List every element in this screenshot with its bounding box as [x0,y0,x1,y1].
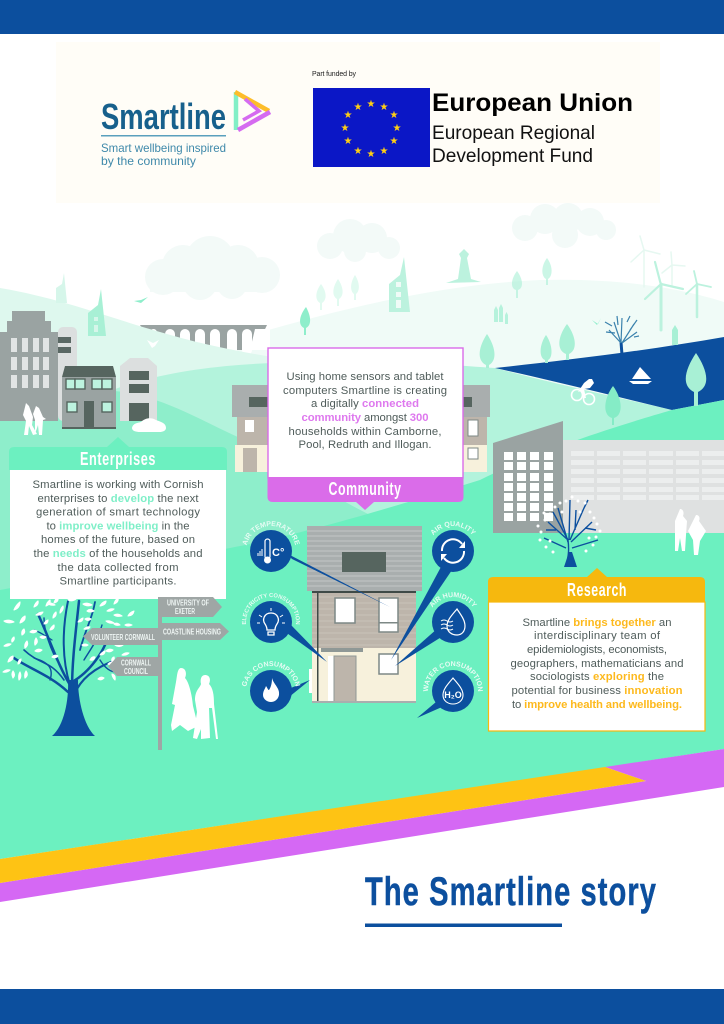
enterprises body: homes of the future, based on [41,534,195,546]
enterprises heading: Enterprises [80,449,156,469]
sign: Cornwall Council [108,657,159,676]
EU flag: ★ [367,149,376,160]
icon: air temperature: C° [272,547,284,559]
community body [268,348,463,478]
white bird [147,340,159,348]
enterprises body: Smartline is working with Cornish [32,479,204,491]
research body: epidemiologists, economists, [527,644,667,656]
icon: air quality: AIR QUALITY [431,521,476,536]
research heading: Research [567,580,627,600]
research buildings [493,421,724,533]
middle hill [100,362,724,560]
icon: gas consumption: GAS CONSUMPTION [242,661,300,686]
EU flag: ★ [354,146,363,157]
Smartline logo: Smart wellbeing inspired [101,141,226,155]
sign: University of Exeter: EXETER [175,607,195,616]
sign: Cornwall Council: COUNCIL [124,667,148,676]
research header [488,568,705,602]
enterprises body: to improve wellbeing in the [46,520,190,532]
research body: to improve health and wellbeing. [512,699,682,711]
enterprises body: Smartline participants. [60,576,176,588]
EU text: Development Fund [432,146,593,167]
icon: water consumption: WATER CONSUMPTION [423,661,483,692]
community body: a digitally connected [311,398,419,410]
wind turbines [631,236,711,330]
research tree [536,496,602,567]
community body: households within Camborne, [288,426,442,438]
left hill [0,288,300,420]
community body: computers Smartline is creating [283,385,447,397]
landmark silhouettes [56,249,481,336]
white car [132,418,166,432]
sign: Volunteer Cornwall: VOLUNTEER CORNWALL [91,633,155,642]
background house left [232,385,268,472]
Smartline logo [101,92,270,168]
icon: water consumption [423,661,483,712]
enterprises body: the data collected from [58,562,178,574]
EU text: European Union [432,89,633,117]
research body: interdisciplinary team of [534,630,661,642]
viaduct [140,325,270,355]
panel: community [268,348,464,510]
part funded label: Part funded by [312,71,356,78]
EU flag: ★ [341,123,350,134]
Smartline logo: Smartline [101,96,226,137]
research body [488,602,705,731]
blue wedge [495,337,724,410]
icon: air humidity: AIR HUMIDITY [430,592,478,608]
left city buildings [0,311,157,429]
EU flag: ★ [367,99,376,110]
sign: Coastline Housing [162,623,229,640]
central house [307,526,422,703]
sign: Volunteer Cornwall [83,628,159,645]
community body: Pool, Redruth and Illogan. [298,439,432,451]
research body: potential for business innovation [512,685,683,697]
EU text: European Regional [432,123,595,144]
enterprises body: generation of smart technology [36,506,200,518]
EU flag: ★ [380,146,389,157]
research body: sociologists exploring the [530,671,664,683]
lighthouse monument [446,249,481,283]
sensor pointers [284,553,452,718]
clouds [145,203,616,300]
signpost [83,597,229,750]
engine house right [389,257,410,312]
icon: gas consumption [242,661,300,712]
bottom bar [0,989,724,1024]
community heading: Community [328,479,402,499]
panel: header logos [56,42,660,203]
icon: electricity consumption [242,593,300,643]
cyclist [572,379,594,404]
panel: research [488,568,705,731]
white pedestrians [23,403,46,435]
EU flag: ★ [344,136,353,147]
community body: Using home sensors and tablet [286,371,444,383]
sign: University of Exeter [159,597,222,617]
sailing boat [629,367,652,384]
EU flag [313,88,430,167]
dark blue tree on horizon [605,316,639,355]
engine house left [88,289,106,336]
research body: Smartline brings together an [522,617,672,629]
icon: air temperature: AIR TEMPERATURE [242,521,300,546]
lower left hill [0,391,370,600]
EU flag: ★ [344,110,353,121]
EU flag: ★ [390,110,399,121]
enterprises body: enterprises to develop the next [38,493,199,505]
main green ground [0,400,724,859]
background house right [463,385,490,472]
distant right hill [200,280,724,420]
EU text [432,89,633,167]
sign: University of Exeter: UNIVERSITY OF [167,598,209,608]
Smartline logo: by the community [101,154,196,168]
sign: Cornwall Council: CORNWALL [121,658,151,668]
sign: Coastline Housing: COASTLINE HOUSING [163,628,221,636]
EU flag: ★ [380,102,389,113]
community header [268,477,464,510]
small trees and walkers [134,258,706,425]
icon: air humidity [430,592,478,643]
EU flag: ★ [393,123,402,134]
icon: air quality [431,521,476,572]
elderly couple [171,668,218,739]
panel: enterprises [9,437,227,599]
research people [675,509,706,555]
icon: air temperature [242,521,300,572]
EU flag: ★ [390,136,399,147]
icon: water consumption: H₂O [444,690,462,700]
enterprises body: the needs of the households and [34,548,202,560]
enterprises header [9,437,227,470]
icon: electricity consumption: ELECTRICITY CONSUMPTION [242,593,300,624]
title underline [365,924,562,927]
community body: community amongst 300 [302,412,428,424]
enterprises body [10,470,226,599]
navy tree with white leaves [3,597,134,736]
top bar [0,0,724,34]
research body: geographers, mathematicians and [510,658,684,670]
faint engine house [56,273,67,303]
EU flag: ★ [354,102,363,113]
bottom stripes [0,749,724,902]
